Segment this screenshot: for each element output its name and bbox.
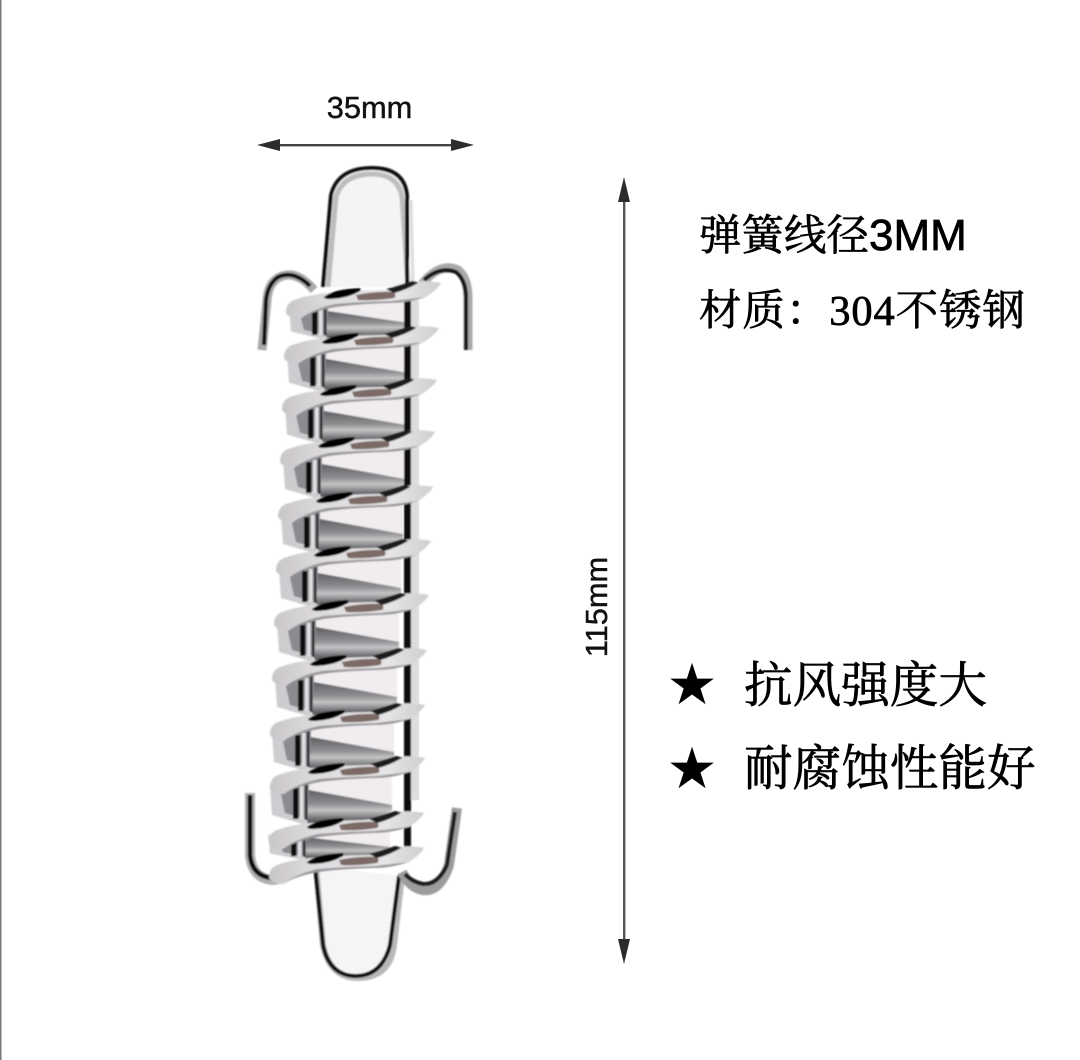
icon: star: ★ [666, 652, 718, 718]
spring coils [269, 281, 441, 884]
arrow: width dimension [257, 139, 474, 151]
bottom left hook [250, 793, 294, 880]
top right hook [422, 268, 468, 350]
top loop [323, 168, 413, 287]
spring core [268, 296, 411, 860]
height label: 115mm: 115mm [579, 557, 614, 657]
spec: wire diameter: 弹簧线径3MM [699, 211, 967, 260]
top left hook [262, 275, 314, 350]
feature: wind resistance: 抗风强度大 [744, 659, 987, 713]
illustration: stainless steel spring [250, 168, 468, 978]
icon: star: ★ [666, 736, 718, 802]
right guide bar [404, 300, 419, 850]
feature: corrosion resistance: 耐腐蚀性能好 [744, 742, 1036, 796]
bottom loop [315, 866, 402, 978]
left edge line [0, 0, 2, 1060]
feature: corrosion resistance [666, 736, 1036, 802]
arrow: height dimension [618, 177, 630, 964]
feature: wind resistance [666, 652, 987, 718]
width label: 35mm: 35mm [327, 90, 412, 125]
bottom right hook [402, 808, 457, 890]
spec: material: 材质：304不锈钢 [699, 288, 1025, 335]
